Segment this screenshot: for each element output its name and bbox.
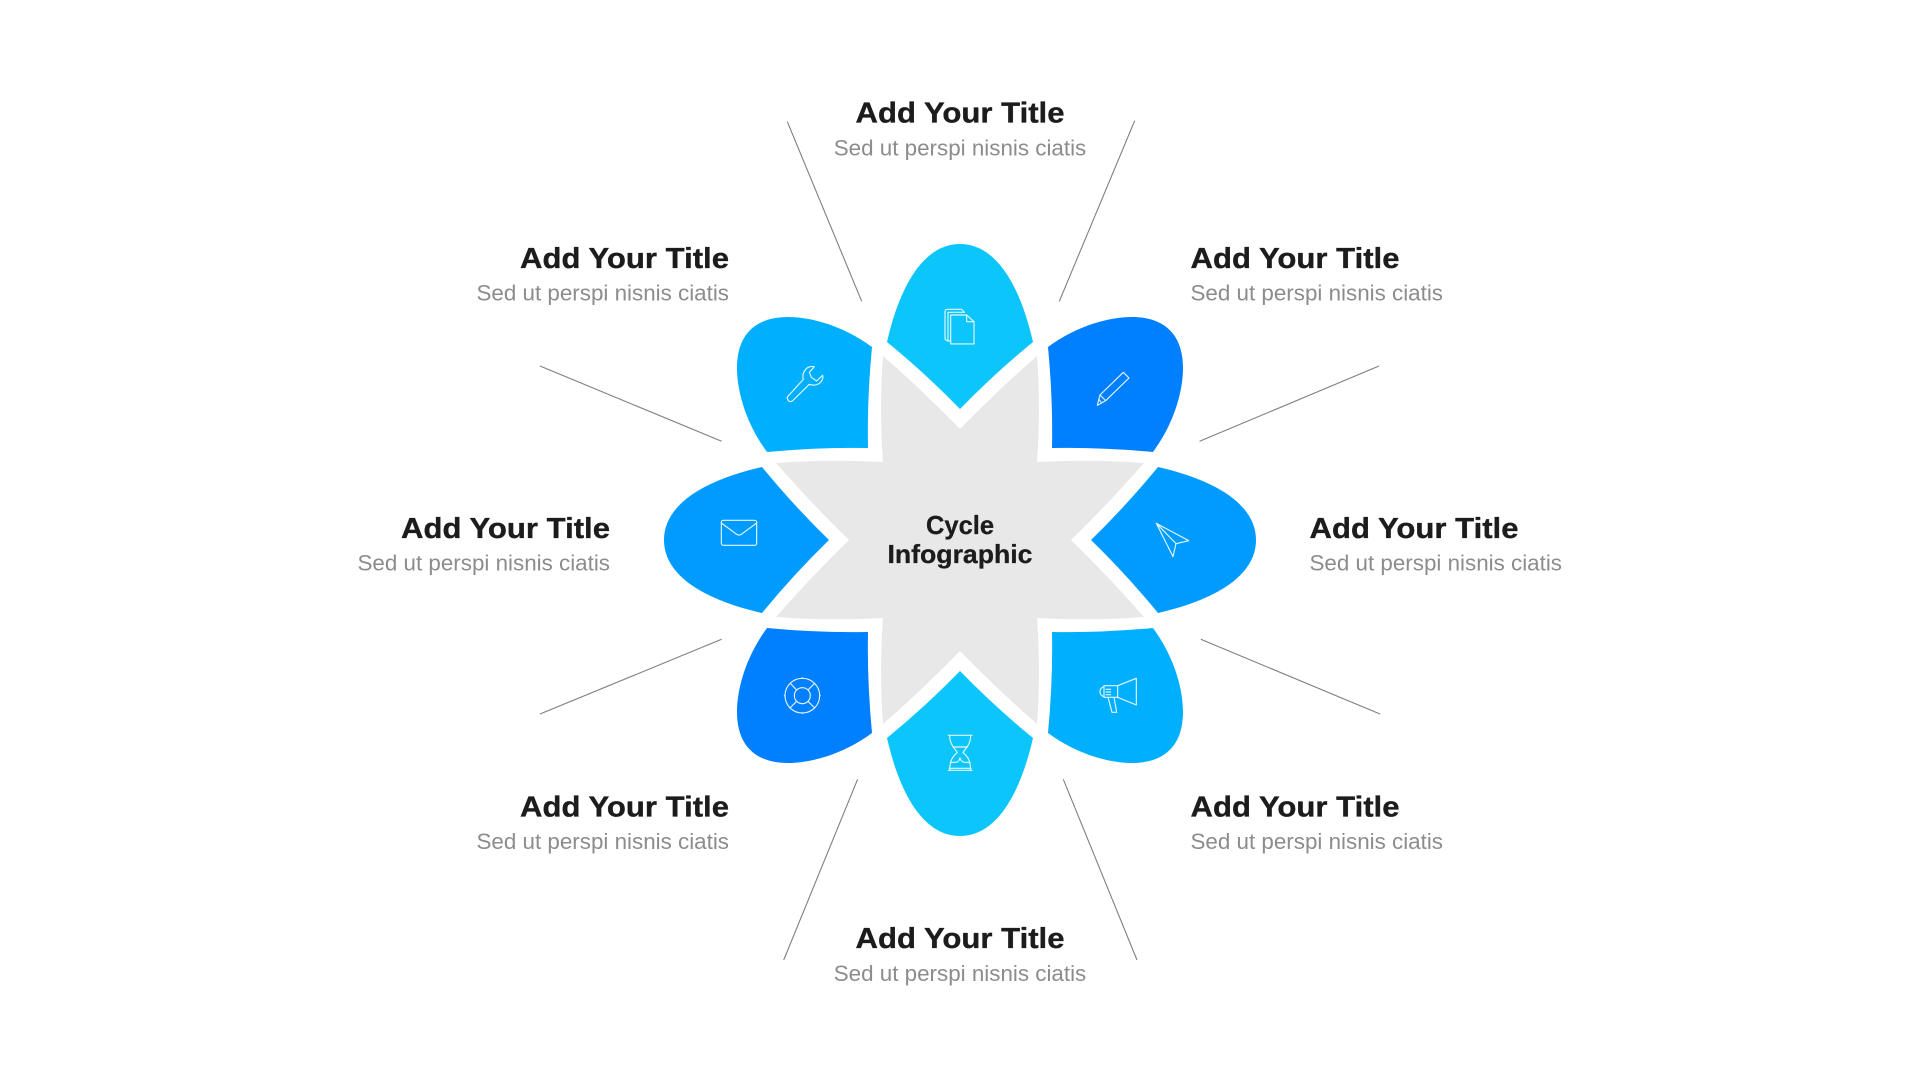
petal: left: [664, 467, 829, 613]
centre star: [776, 356, 1144, 724]
label: top: Add Your Title: [856, 98, 1064, 130]
centre label: Infographic: [888, 539, 1032, 569]
label: upper right: Sed ut perspi nisnis ciatis: [1190, 280, 1443, 306]
icon: hourglass: [948, 735, 972, 770]
icon: documents: [945, 309, 974, 344]
label: upper right: [1190, 243, 1443, 306]
centre label: [888, 510, 1032, 569]
icon: lifebuoy: [784, 678, 820, 714]
petal: top: [887, 244, 1033, 409]
centre label: Cycle: [926, 510, 994, 540]
icon: envelope: [721, 520, 757, 545]
leader lines: [540, 121, 1380, 960]
label: lower right: [1190, 792, 1443, 854]
petal: upper right: [1048, 317, 1183, 452]
label: bottom: Sed ut perspi nisnis ciatis: [834, 961, 1086, 986]
label: lower left: [476, 792, 729, 854]
label: upper left: Add Your Title: [520, 243, 729, 275]
label: bottom: Add Your Title: [856, 923, 1064, 955]
label: right: [1310, 513, 1562, 576]
petal: lower left: [737, 628, 872, 763]
icon: wrench: [787, 366, 823, 402]
label: right: Sed ut perspi nisnis ciatis: [1310, 550, 1562, 576]
label: right: Add Your Title: [1310, 513, 1518, 545]
label: top: [834, 98, 1086, 160]
label: lower right: Sed ut perspi nisnis ciatis: [1190, 829, 1443, 854]
petal: lower right: [1048, 628, 1183, 763]
petal: upper left: [737, 317, 872, 452]
label: left: [358, 513, 610, 576]
label: left: Add Your Title: [401, 513, 610, 545]
label: upper left: [476, 243, 729, 306]
icon: pencil: [1097, 372, 1129, 405]
icon: megaphone: [1100, 678, 1136, 712]
petal: bottom: [887, 671, 1033, 836]
label: top: Sed ut perspi nisnis ciatis: [834, 135, 1086, 160]
icon: paper plane: [1156, 523, 1189, 557]
label: upper left: Sed ut perspi nisnis ciatis: [476, 280, 729, 306]
label: lower left: Add Your Title: [520, 792, 729, 824]
label: upper right: Add Your Title: [1190, 243, 1400, 275]
label: lower right: Add Your Title: [1190, 792, 1400, 824]
petal: right: [1091, 467, 1256, 613]
label: left: Sed ut perspi nisnis ciatis: [358, 550, 610, 576]
label: lower left: Sed ut perspi nisnis ciatis: [476, 829, 729, 854]
label: bottom: [834, 923, 1086, 986]
